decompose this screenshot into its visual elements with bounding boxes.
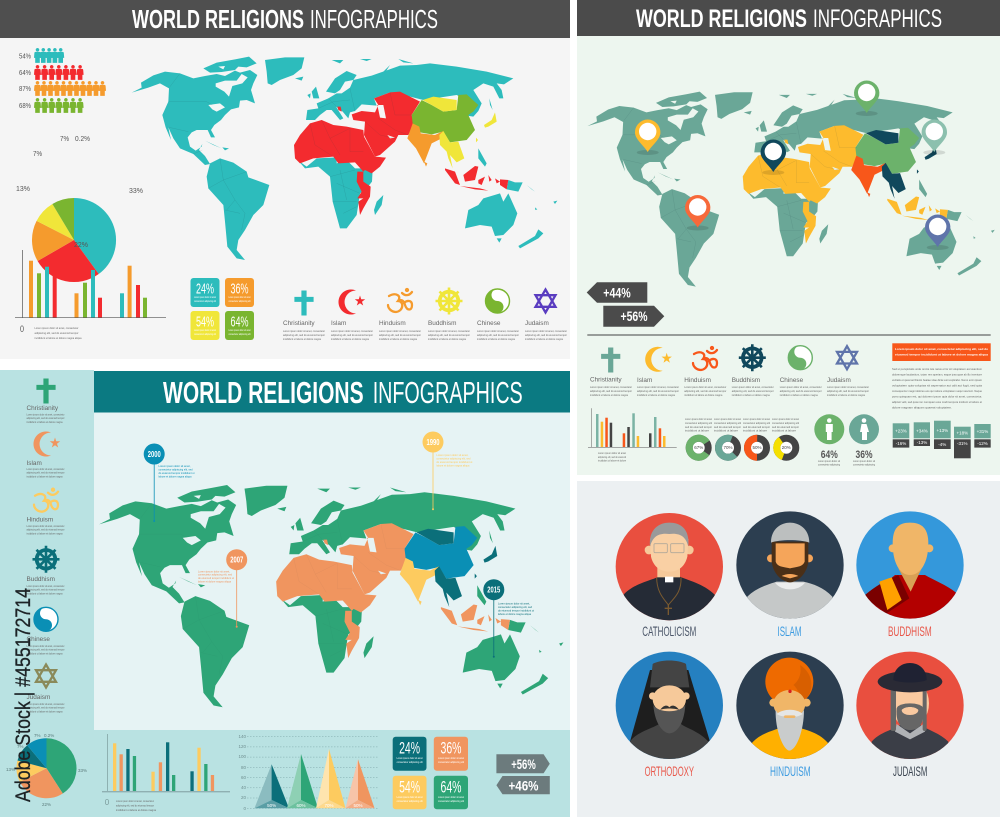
panel: grey infographic bbox=[0, 0, 570, 359]
sidebar religion list bbox=[26, 378, 65, 714]
triangle chart: 40 bbox=[241, 785, 246, 790]
religion icons and labels: grey panel: adipiscing elit, sed do eiusmod tempor bbox=[428, 333, 470, 337]
religion icons and labels: mint panel: Christianity bbox=[590, 376, 622, 384]
mini up and down bars: -13% bbox=[917, 440, 927, 445]
religion icons and labels: grey panel bbox=[283, 288, 567, 341]
sidebar religion list: Judaism bbox=[26, 694, 50, 701]
donut charts: mint panel: sed do eiusmod tempor bbox=[743, 425, 770, 429]
callout and paragraph: mint panel: porro quisquam est, qui dolorem ipsum quia dolor sit amet, consectetur, bbox=[892, 394, 982, 398]
stat tiles: teal panel: 24% bbox=[399, 738, 420, 758]
label: hinduism: HINDUISM bbox=[770, 763, 811, 779]
triangle chart: 50% bbox=[267, 803, 276, 808]
religion icons and labels: grey panel: Christianity bbox=[283, 320, 315, 327]
timeline marker: 1990 bbox=[422, 432, 473, 510]
sidebar religion list: incididunt ut labore et dolore magna bbox=[26, 474, 63, 478]
timeline marker: 2007: consectetur adipiscing elit, sed bbox=[198, 573, 232, 577]
pie chart: grey panel: 13% bbox=[16, 184, 30, 193]
religion icons and labels: grey panel: Buddhism bbox=[428, 320, 456, 327]
stat tiles: grey panel: Lorem ipsum dolor sit amet bbox=[194, 295, 216, 299]
stat tiles: teal panel: consectetur adipiscing elit bbox=[438, 760, 464, 764]
stat tiles: grey panel: 64% bbox=[230, 314, 248, 330]
religion icons and labels: mint panel: Lorem ipsum dolor sit amet, consectetur bbox=[590, 385, 632, 389]
bar chart: teal panel: adipiscing elit, sed do eiusmod tempor bbox=[116, 804, 154, 808]
mini up and down bars: -4% bbox=[938, 442, 946, 447]
religion icons and labels: grey panel: adipiscing elit, sed do eiusmod tempor bbox=[331, 333, 373, 337]
panel: teal infographic bbox=[0, 370, 570, 817]
timeline marker: 2000: do eiusmod tempor incididunt ut bbox=[158, 471, 195, 475]
religion icons and labels: mint panel: incididunt ut labore et dolore magna bbox=[590, 393, 628, 397]
sidebar religion list: incididunt ut labore et dolore magna bbox=[26, 652, 63, 656]
religion icons and labels: mint panel: incididunt ut labore et dolore magna bbox=[637, 393, 675, 397]
stat tiles: grey panel: 54% bbox=[196, 314, 214, 330]
donut charts: mint panel: consectetur adipiscing elit bbox=[714, 421, 741, 425]
timeline marker: 2000: 2000 bbox=[148, 450, 161, 459]
callout and paragraph: mint panel: Lorem ipsum dolor sit amet, consectetur adipiscing elit, sed do bbox=[895, 347, 988, 351]
pie chart: teal panel bbox=[6, 733, 87, 807]
timeline marker: 2015: do eiusmod tempor incididunt ut bbox=[498, 608, 534, 612]
stat tiles: grey panel: consectetur adipiscing elit bbox=[228, 332, 251, 336]
donut charts: mint panel: 50% bbox=[752, 445, 762, 450]
bar chart: teal panel bbox=[102, 734, 230, 812]
people percentage rows: 68% bbox=[19, 101, 31, 110]
stat tiles: teal panel: Lorem ipsum dolor sit amet bbox=[438, 795, 464, 799]
mini up and down bars: -16% bbox=[896, 441, 906, 446]
religion icons and labels: grey panel: incididunt ut labore et dolore magna bbox=[477, 337, 515, 341]
timeline marker: 2000: consectetur adipiscing elit, sed bbox=[158, 468, 193, 472]
callout and paragraph: mint panel: eiusmod tempor incididunt ut labore et dolore magna aliqua bbox=[895, 352, 989, 356]
sidebar religion list: adipiscing elit, sed do eiusmod tempor bbox=[26, 588, 65, 592]
stat tiles: grey panel: 24% bbox=[196, 280, 214, 298]
donut charts: mint panel: consectetur adipiscing elit bbox=[772, 421, 799, 425]
timeline marker: 2007: Lorem ipsum dolor sit amet, bbox=[198, 569, 230, 573]
religion icons and labels: grey panel: incididunt ut labore et dolore magna bbox=[331, 337, 369, 341]
sidebar religion list: incididunt ut labore et dolore magna bbox=[26, 532, 63, 536]
stat tiles: grey panel: consectetur adipiscing elit bbox=[194, 299, 216, 303]
pie chart: grey panel: 22% bbox=[74, 240, 88, 249]
pie chart: teal panel: 7% bbox=[34, 733, 41, 738]
stat tiles: teal panel: Lorem ipsum dolor sit amet bbox=[397, 795, 423, 799]
male and female stats: 36% bbox=[856, 449, 873, 461]
donut charts: mint panel: incididunt ut labore bbox=[772, 428, 797, 432]
bar chart: grey panel bbox=[15, 250, 166, 340]
arrow: +56%: +56% bbox=[620, 308, 648, 324]
panel: mint infographic bbox=[577, 0, 1000, 475]
pie chart: grey panel: 7% bbox=[60, 134, 69, 143]
religion icons and labels: mint panel: incididunt ut labore et dolore magna bbox=[780, 393, 818, 397]
donut charts: mint panel: incididunt ut labore bbox=[714, 428, 739, 432]
religion icons and labels: mint panel: adipiscing elit, sed do eiusmod tempor bbox=[732, 389, 774, 393]
religion icons and labels: grey panel: incididunt ut labore et dolore magna bbox=[525, 337, 563, 341]
timeline marker: 2007: 2007 bbox=[230, 556, 244, 565]
religion icons and labels: mint panel: incididunt ut labore et dolore magna bbox=[827, 393, 865, 397]
world map: teal panel bbox=[99, 485, 563, 707]
donut charts: mint panel: 70% bbox=[723, 445, 733, 450]
arrow: +44% bbox=[587, 282, 647, 303]
callout and paragraph: mint panel: adipisci velit, sed quia non numquam eius modi tempora incidunt ut labore et bbox=[892, 400, 982, 404]
triangle chart: 0 bbox=[243, 806, 246, 811]
callout and paragraph: mint panel: Sed ut perspiciatis unde omnis iste natus error sit voluptatem accusantium bbox=[892, 367, 983, 371]
stat tiles: teal panel: 36% bbox=[440, 738, 462, 758]
sidebar religion list: adipiscing elit, sed do eiusmod tempor bbox=[26, 470, 65, 474]
donut charts: mint panel: 67% bbox=[694, 445, 703, 450]
donut charts: mint panel: sed do eiusmod tempor bbox=[714, 425, 741, 429]
world map: grey panel bbox=[132, 57, 557, 260]
religion icons and labels: grey panel: Lorem ipsum dolor sit amet, consectetur bbox=[331, 329, 373, 333]
stat tiles: teal panel: 64% bbox=[440, 778, 462, 796]
bar chart: mint panel: Lorem ipsum dolor sit amet bbox=[598, 451, 626, 455]
arrow: +46% teal panel: +46% bbox=[508, 778, 539, 794]
religion icons and labels: grey panel: Islam bbox=[331, 320, 346, 327]
figure: muslim man bbox=[733, 510, 847, 623]
triangle chart: 100 bbox=[238, 754, 246, 759]
donut charts: mint panel: Lorem ipsum dolor sit amet bbox=[772, 417, 799, 421]
timeline marker: 1990: do eiusmod tempor incididunt ut bbox=[436, 460, 473, 464]
title bar: teal panel: WORLD RELIGIONS bbox=[163, 375, 364, 410]
title bar: teal panel: INFOGRAPHICS bbox=[373, 375, 523, 410]
religion icons and labels: grey panel: Lorem ipsum dolor sit amet, consectetur bbox=[428, 329, 470, 333]
stat tiles: teal panel: consectetur adipiscing elit bbox=[397, 799, 423, 803]
people percentage rows: 87% bbox=[19, 84, 31, 93]
timeline marker: 2007: labore et dolore magna aliqua bbox=[198, 579, 231, 583]
stat tiles: teal panel bbox=[393, 737, 468, 809]
timeline marker: 2015: labore et dolore magna aliqua bbox=[498, 612, 531, 616]
religion icons and labels: mint panel: adipiscing elit, sed do eiusmod tempor bbox=[590, 389, 632, 393]
stat tiles: grey panel: consectetur adipiscing elit bbox=[194, 332, 216, 336]
male and female stats: 64% bbox=[821, 449, 838, 461]
religion icons and labels: grey panel: Lorem ipsum dolor sit amet, consectetur bbox=[477, 329, 519, 333]
donut charts: mint panel: incididunt ut labore bbox=[743, 428, 768, 432]
religion icons and labels: mint panel: Lorem ipsum dolor sit amet, consectetur bbox=[827, 385, 869, 389]
mini up and down bars: -31% bbox=[957, 441, 968, 446]
title bar: mint panel bbox=[577, 0, 1000, 36]
sidebar religion list: Christianity bbox=[26, 405, 59, 412]
title bar: grey panel: INFOGRAPHICS bbox=[310, 4, 438, 34]
pie chart: teal panel: 7% bbox=[17, 744, 24, 749]
timeline marker: 2015: Lorem ipsum dolor sit amet, bbox=[498, 601, 530, 605]
donut charts: mint panel: incididunt ut labore bbox=[685, 428, 710, 432]
timeline marker: 1990: labore et dolore magna aliqua bbox=[436, 464, 470, 468]
donut charts: mint panel bbox=[685, 417, 799, 461]
pie chart: teal panel: 13% bbox=[6, 767, 15, 772]
bar chart: mint panel bbox=[588, 408, 677, 462]
bar chart: grey panel: 0 bbox=[20, 324, 24, 334]
pie chart: grey panel: 33% bbox=[129, 186, 143, 195]
religion icons and labels: mint panel: adipiscing elit, sed do eiusmod tempor bbox=[827, 389, 869, 393]
timeline marker: 2000 bbox=[144, 444, 195, 522]
male and female stats: consectetur adipiscing bbox=[853, 462, 875, 466]
religion icons and labels: grey panel: Lorem ipsum dolor sit amet, consectetur bbox=[283, 329, 325, 333]
figure: orthodox priest bbox=[616, 652, 723, 759]
pie chart: teal panel: 22% bbox=[42, 802, 51, 807]
panel: religious figures bbox=[577, 481, 1000, 817]
pie chart: teal panel: 0.2% bbox=[44, 733, 54, 738]
religion icons and labels: grey panel: Hinduism bbox=[379, 320, 406, 327]
donut charts: mint panel: sed do eiusmod tempor bbox=[772, 425, 799, 429]
callout and paragraph: mint panel: dolore magnam aliquam quaerat voluptatem. bbox=[892, 406, 952, 410]
donut charts: mint panel: consectetur adipiscing elit bbox=[685, 421, 712, 425]
callout and paragraph: mint panel: voluptatem quia voluptas sit aspernatur aut odit aut fugit, sed quia bbox=[892, 384, 983, 388]
male and female stats: Lorem ipsum dolor sit bbox=[818, 459, 840, 463]
callout and paragraph: mint panel bbox=[892, 343, 991, 410]
religion icons and labels: mint panel: adipiscing elit, sed do eiusmod tempor bbox=[684, 389, 726, 393]
mini up and down bars: +23% bbox=[895, 428, 907, 434]
donut charts: mint panel: Lorem ipsum dolor sit amet bbox=[743, 417, 770, 421]
religion icons and labels: mint panel bbox=[590, 344, 869, 397]
sidebar religion list: adipiscing elit, sed do eiusmod tempor bbox=[26, 648, 65, 652]
people percentage rows: 54% bbox=[19, 52, 31, 60]
figure: catholic priest bbox=[616, 513, 723, 620]
figure: buddhist monk bbox=[853, 510, 967, 623]
stat tiles: grey panel: 36% bbox=[230, 280, 248, 298]
religion icons and labels: grey panel: adipiscing elit, sed do eiusmod tempor bbox=[477, 333, 519, 337]
triangle chart: 60 bbox=[241, 775, 246, 780]
stat tiles: teal panel: consectetur adipiscing elit bbox=[438, 799, 464, 803]
arrow: +44%: +44% bbox=[603, 284, 631, 300]
religion icons and labels: grey panel: Lorem ipsum dolor sit amet, consectetur bbox=[379, 329, 421, 333]
triangle chart: 50% bbox=[353, 803, 363, 808]
bar chart: mint panel: adipiscing elit, sed do eiusmod bbox=[598, 455, 626, 459]
sidebar religion list: Islam bbox=[26, 460, 42, 467]
sidebar religion list: Buddhism bbox=[26, 576, 55, 583]
timeline marker: 2015: 2015 bbox=[487, 586, 501, 595]
sidebar religion list: Lorem ipsum dolor sit amet, consectetur bbox=[26, 467, 65, 471]
male and female stats: Lorem ipsum dolor sit bbox=[853, 459, 875, 463]
religion icons and labels: mint panel: Buddhism bbox=[732, 377, 760, 384]
timeline marker: 2000: labore et dolore magna aliqua bbox=[158, 475, 192, 479]
triangle chart: 80 bbox=[241, 765, 246, 770]
timeline marker: 2000: Lorem ipsum dolor sit amet, bbox=[158, 464, 191, 468]
sidebar religion list: Lorem ipsum dolor sit amet, consectetur bbox=[26, 412, 65, 416]
sidebar religion list: incididunt ut labore et dolore magna bbox=[26, 420, 63, 424]
religion icons and labels: grey panel: adipiscing elit, sed do eiusmod tempor bbox=[283, 333, 325, 337]
title bar: mint panel: WORLD RELIGIONS bbox=[636, 5, 807, 33]
label: catholicism: CATHOLICISM bbox=[642, 623, 696, 639]
sidebar religion list: Lorem ipsum dolor sit amet, consectetur bbox=[26, 702, 65, 706]
religion icons and labels: grey panel: adipiscing elit, sed do eiusmod tempor bbox=[525, 333, 567, 337]
arrow: +56% bbox=[603, 306, 664, 327]
sidebar religion list: Chinese bbox=[26, 636, 50, 643]
religion icons and labels: grey panel: incididunt ut labore et dolore magna bbox=[428, 337, 466, 341]
bar chart: grey panel: adipiscing elit, sed do eiusmod tempor bbox=[34, 331, 79, 335]
sidebar religion list: incididunt ut labore et dolore magna bbox=[26, 592, 63, 596]
male and female stats: consectetur adipiscing bbox=[818, 462, 840, 466]
timeline marker: 2007: do eiusmod tempor incididunt ut bbox=[198, 576, 234, 580]
religion icons and labels: mint panel: Lorem ipsum dolor sit amet, consectetur bbox=[732, 385, 774, 389]
religion icons and labels: grey panel: Chinese bbox=[477, 320, 501, 327]
stat tiles: grey panel: Lorem ipsum dolor sit amet bbox=[228, 295, 251, 299]
bar chart: grey panel: incididunt ut labore et dolore magna aliqua bbox=[34, 336, 82, 340]
donut charts: mint panel: 20% bbox=[782, 445, 791, 450]
mini up and down bars: +34% bbox=[916, 428, 928, 434]
triangle chart: 120 bbox=[238, 744, 246, 749]
sidebar religion list: adipiscing elit, sed do eiusmod tempor bbox=[26, 416, 65, 420]
religion icons and labels: mint panel: adipiscing elit, sed do eiusmod tempor bbox=[780, 389, 822, 393]
label: buddhism: BUDDHISM bbox=[888, 623, 932, 639]
timeline marker: 1990: Lorem ipsum dolor sit amet, bbox=[436, 453, 469, 457]
bar chart: teal panel: incididunt ut labore et dolore magna bbox=[116, 808, 156, 812]
world map: mint panel bbox=[587, 92, 995, 287]
mini up and down bars bbox=[893, 421, 991, 458]
triangle chart bbox=[238, 734, 378, 811]
stat tiles: grey panel: Lorem ipsum dolor sit amet bbox=[194, 328, 216, 332]
figure: jewish man bbox=[853, 650, 967, 763]
people percentage rows: 64% bbox=[19, 68, 31, 77]
religion icons and labels: mint panel: Lorem ipsum dolor sit amet, consectetur bbox=[684, 385, 726, 389]
mini up and down bars: +31% bbox=[977, 429, 988, 434]
stat tiles: teal panel: Lorem ipsum dolor sit amet bbox=[397, 756, 423, 760]
people percentage rows bbox=[19, 48, 106, 113]
stat tiles: teal panel: consectetur adipiscing elit bbox=[397, 760, 423, 764]
bar chart: teal panel: Lorem ipsum dolor sit amet, consectetur bbox=[116, 799, 154, 803]
arrow: +56% teal panel bbox=[496, 754, 550, 773]
arrow: +56% teal panel: +56% bbox=[511, 756, 536, 772]
religion icons and labels: grey panel: adipiscing elit, sed do eiusmod tempor bbox=[379, 333, 421, 337]
sidebar religion list: adipiscing elit, sed do eiusmod tempor bbox=[26, 706, 65, 710]
sidebar religion list: incididunt ut labore et dolore magna bbox=[26, 710, 63, 714]
religion icons and labels: mint panel: Lorem ipsum dolor sit amet, consectetur bbox=[637, 385, 679, 389]
religion icons and labels: mint panel: adipiscing elit, sed do eiusmod tempor bbox=[637, 389, 679, 393]
donut charts: mint panel: Lorem ipsum dolor sit amet bbox=[714, 417, 741, 421]
pie chart: teal panel: 33% bbox=[78, 768, 87, 773]
timeline marker: 1990: consectetur adipiscing elit, sed bbox=[436, 457, 471, 461]
religion icons and labels: grey panel: Judaism bbox=[525, 320, 549, 327]
male and female stats bbox=[814, 414, 879, 466]
religion icons and labels: mint panel: Islam bbox=[637, 377, 652, 384]
donut charts: mint panel: consectetur adipiscing elit bbox=[743, 421, 770, 425]
bar chart: grey panel: Lorem ipsum dolor sit amet, consectetur bbox=[34, 326, 79, 330]
religion icons and labels: mint panel: Chinese bbox=[780, 377, 804, 384]
religion icons and labels: grey panel: incididunt ut labore et dolore magna bbox=[379, 337, 417, 341]
label: judaism: JUDAISM bbox=[893, 763, 927, 779]
religion icons and labels: mint panel: incididunt ut labore et dolore magna bbox=[684, 393, 723, 397]
sidebar religion list: Lorem ipsum dolor sit amet, consectetur bbox=[26, 584, 65, 588]
religion icons and labels: mint panel: Judaism bbox=[827, 377, 851, 384]
sidebar religion list: adipiscing elit, sed do eiusmod tempor bbox=[26, 528, 65, 532]
triangle chart: 140 bbox=[238, 734, 246, 739]
figure: hindu man bbox=[733, 650, 847, 763]
timeline marker: 2015: consectetur adipiscing elit, sed bbox=[498, 605, 532, 609]
stat tiles: grey panel: consectetur adipiscing elit bbox=[228, 299, 251, 303]
sidebar religion list: Lorem ipsum dolor sit amet, consectetur bbox=[26, 524, 65, 528]
bar chart: mint panel: incididunt ut labore et dolore bbox=[598, 458, 626, 462]
religion icons and labels: grey panel: Lorem ipsum dolor sit amet, consectetur bbox=[525, 329, 567, 333]
religion icons and labels: mint panel: Hinduism bbox=[684, 377, 711, 384]
religion icons and labels: mint panel: incididunt ut labore et dolore magna bbox=[732, 393, 770, 397]
triangle chart: 20 bbox=[241, 795, 246, 800]
title bar: grey panel: WORLD RELIGIONS bbox=[132, 4, 304, 34]
pie chart: grey panel: 7% bbox=[33, 149, 42, 158]
donut charts: mint panel: sed do eiusmod tempor bbox=[685, 425, 712, 429]
callout and paragraph: mint panel: consequuntur magni dolores eos qui ratione voluptatem sequi nesciunt. Neque bbox=[892, 389, 982, 393]
title bar: teal panel bbox=[94, 371, 570, 412]
sidebar religion list: Lorem ipsum dolor sit amet, consectetur bbox=[26, 644, 65, 648]
triangle chart: 60% bbox=[296, 803, 306, 808]
callout and paragraph: mint panel: veritatis et quasi architecto beatae vitae dicta sunt explicabo. Nemo enim ipsam bbox=[892, 378, 983, 382]
stat tiles: grey panel bbox=[190, 278, 254, 340]
mini up and down bars: -12% bbox=[977, 441, 988, 446]
sidebar religion list: Hinduism bbox=[26, 516, 53, 524]
timeline marker: 1990: 1990 bbox=[426, 438, 440, 447]
stock id watermark: Adobe Stock | #455172714 bbox=[12, 588, 35, 802]
timeline marker: 2007 bbox=[198, 549, 247, 628]
label: islam: ISLAM bbox=[778, 623, 802, 639]
callout and paragraph: mint panel: doloremque laudantium, totam rem aperiam, eaque ipsa quae ab illo inventore bbox=[892, 372, 982, 376]
title bar: mint panel: INFOGRAPHICS bbox=[813, 5, 942, 33]
religion icons and labels: grey panel: incididunt ut labore et dolore magna bbox=[283, 337, 321, 341]
mini up and down bars: +13% bbox=[936, 428, 948, 433]
timeline marker: 2015 bbox=[483, 579, 534, 658]
triangle chart: 70% bbox=[324, 803, 334, 808]
arrow: +46% teal panel bbox=[496, 776, 550, 794]
pie chart: grey panel bbox=[16, 134, 143, 282]
mini up and down bars: +18% bbox=[956, 430, 968, 436]
religion icons and labels: mint panel: Lorem ipsum dolor sit amet, consectetur bbox=[780, 385, 822, 389]
pie chart: grey panel: 0.2% bbox=[75, 134, 90, 143]
stat tiles: teal panel: Lorem ipsum dolor sit amet bbox=[438, 756, 464, 760]
stat tiles: grey panel: Lorem ipsum dolor sit amet bbox=[228, 328, 251, 332]
label: orthodoxy: ORTHODOXY bbox=[645, 763, 694, 779]
stat tiles: teal panel: 54% bbox=[399, 778, 420, 796]
title bar: grey panel bbox=[0, 0, 570, 38]
donut charts: mint panel: Lorem ipsum dolor sit amet bbox=[685, 417, 712, 421]
map pins bbox=[635, 81, 950, 250]
bar chart: teal panel: 0 bbox=[105, 798, 110, 807]
